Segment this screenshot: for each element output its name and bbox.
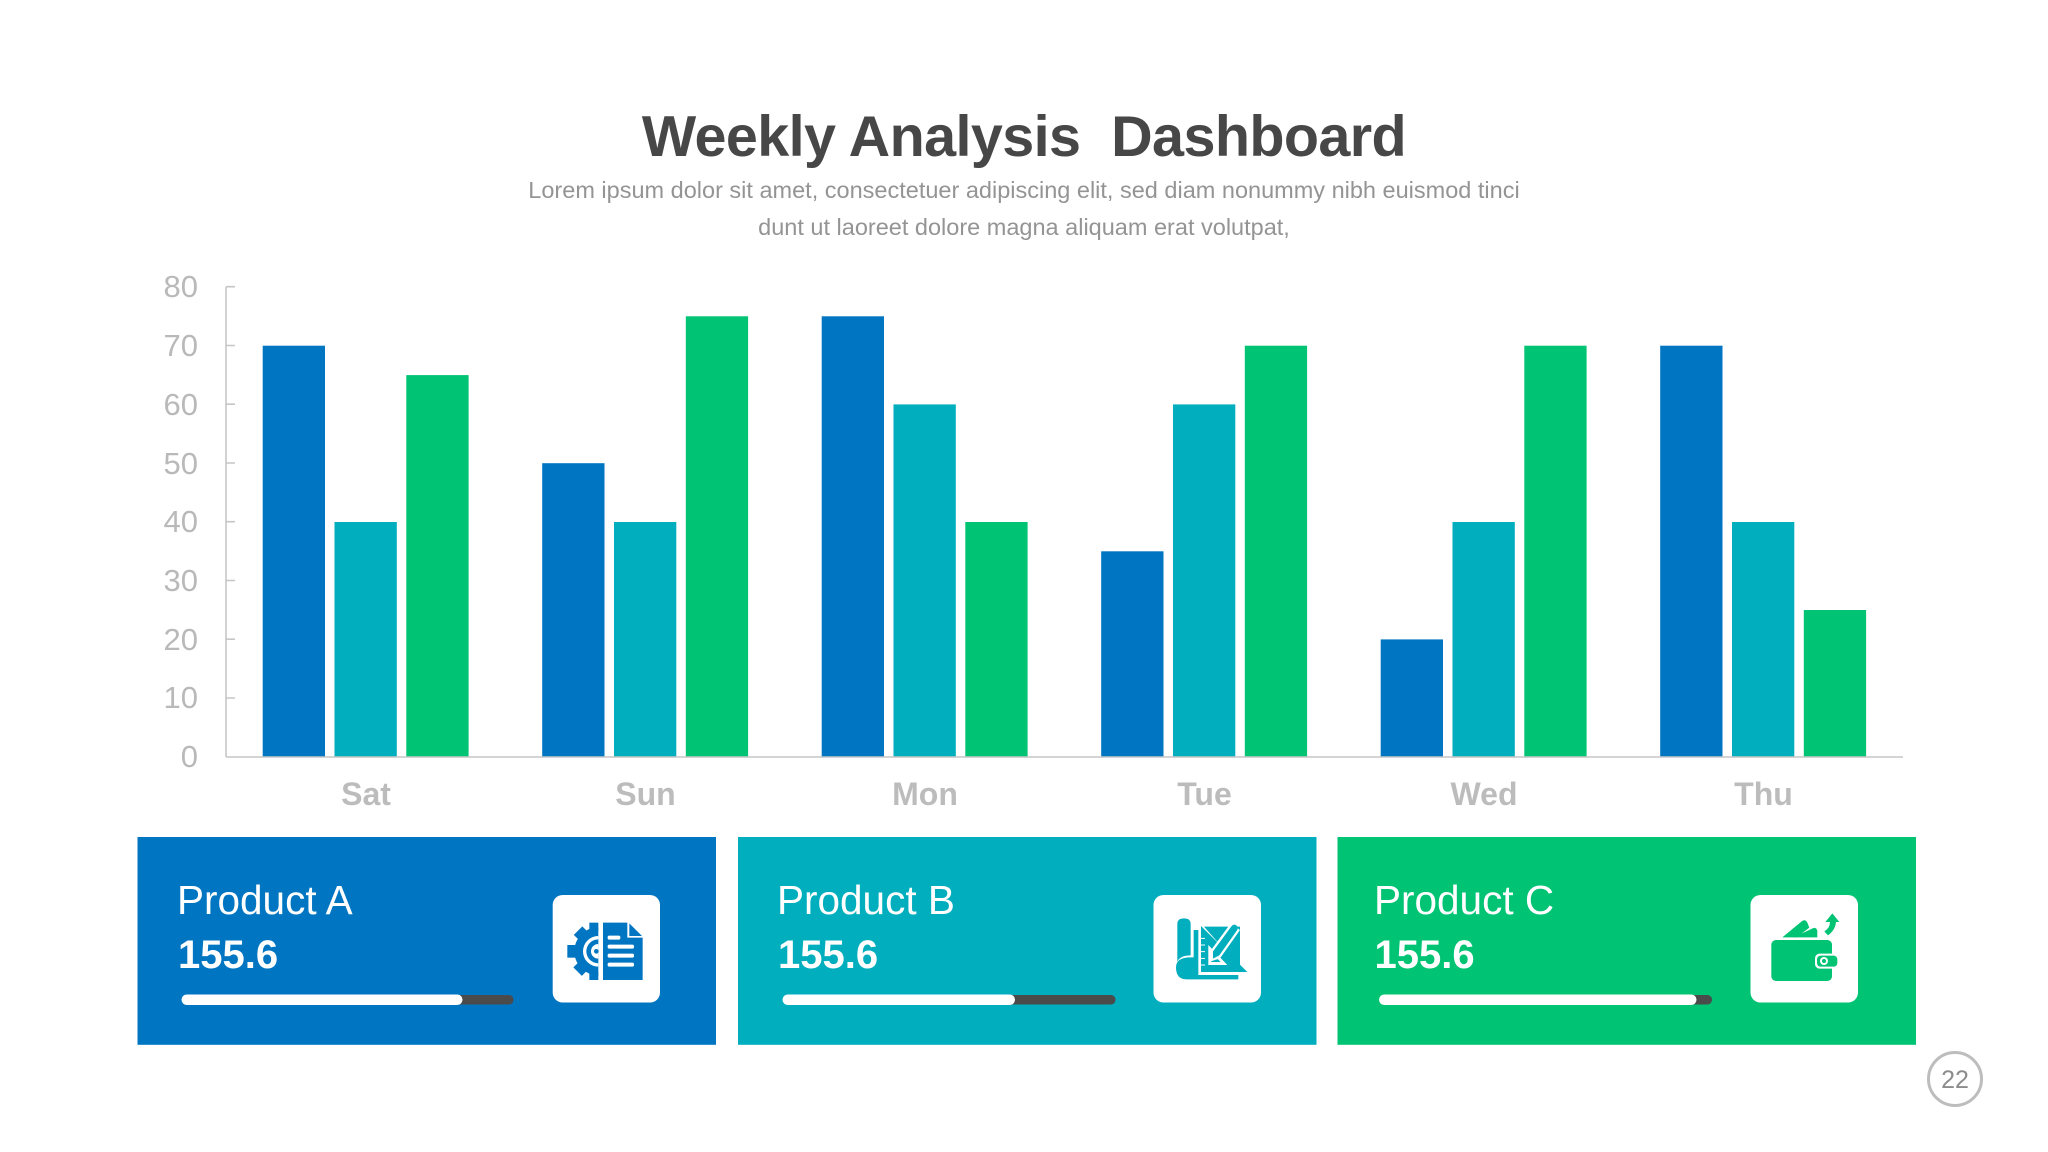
x axis labels: Wed [1451,776,1517,812]
y axis labels: 40 [164,504,198,539]
page number [1928,1052,1982,1106]
page number: 22 [1941,1066,1969,1094]
progress bar: Product A [182,994,514,1005]
title: Weekly Analysis Dashboard [642,105,1406,169]
y axis labels: 80 [164,269,198,304]
x axis labels: Sat [341,776,391,812]
label: Product B: Product B [777,877,955,923]
bars: Thu [1660,346,1866,757]
x axis labels: Sun [615,776,676,812]
panel: Product C [1338,837,1916,1045]
y axis labels [164,269,198,774]
x axis labels: Mon [892,776,958,812]
bars: Mon [822,316,1028,757]
progress bar: Product C [1379,994,1712,1005]
x axis line [226,756,1903,758]
bars: Wed [1381,346,1587,757]
y axis [226,287,235,757]
y axis labels: 30 [164,563,198,598]
label: Product C: Product C [1374,877,1554,923]
y axis labels: 50 [164,446,198,481]
bars: Sun [542,316,748,757]
icon: wallet [1750,895,1858,1002]
y axis labels: 20 [164,622,198,657]
subtitle text: dunt ut laoreet dolore magna aliquam erat volutpat, [758,214,1290,240]
value: Product A: 155.6 [178,933,278,977]
y axis labels: 10 [164,680,198,715]
label: Product A: Product A [177,877,353,923]
progress bar: Product B [782,994,1116,1005]
subtitle text [528,177,1520,240]
y axis labels: 0 [181,739,198,774]
icon: gear and document [553,895,660,1002]
bar chart [164,269,1903,812]
y axis labels: 60 [164,387,198,422]
x axis labels: Thu [1734,776,1793,812]
value: Product B: 155.6 [778,933,878,977]
y axis labels: 70 [164,328,198,363]
value: Product C: 155.6 [1374,933,1475,977]
panel: Product A [138,837,716,1045]
icon: blueprint and ruler [1154,895,1261,1002]
panel: Product B [738,837,1316,1045]
bars: Tue [1101,346,1307,757]
bars: Sat [263,346,469,757]
x axis labels: Tue [1177,776,1232,812]
subtitle text: Lorem ipsum dolor sit amet, consectetuer adipiscing elit, sed diam nonummy nibh euismod tinci [528,177,1520,203]
x axis labels [341,776,1793,812]
